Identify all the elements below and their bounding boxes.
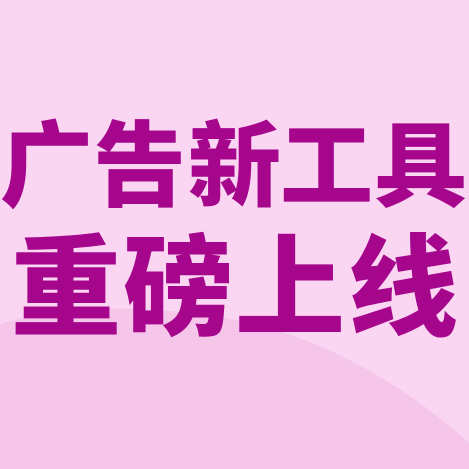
title line 1: 广告新工具 xyxy=(0,115,467,219)
title line 2: 重磅上线 xyxy=(11,228,458,351)
lower curved background panel xyxy=(0,309,469,469)
